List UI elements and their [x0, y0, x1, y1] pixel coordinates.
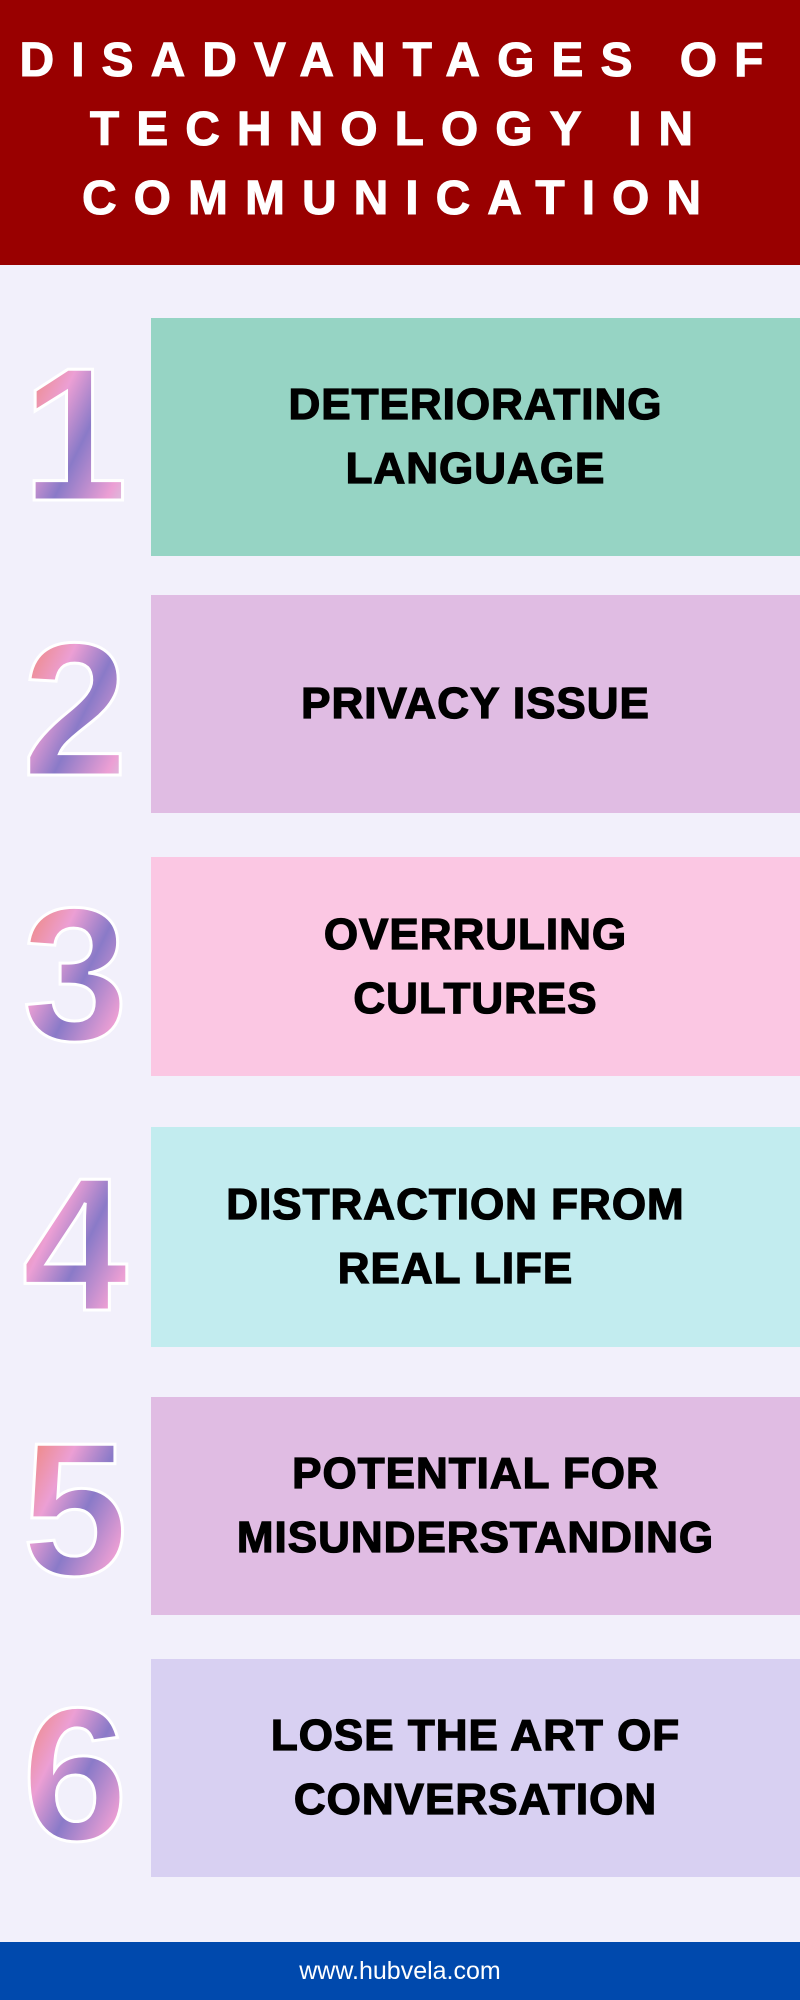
footer [0, 1942, 800, 2000]
box 1: LANGUAGE [346, 444, 605, 493]
box 5 [151, 1397, 800, 1615]
title: TECHNOLOGY IN [90, 103, 710, 156]
box 5: POTENTIAL FOR [292, 1449, 659, 1498]
box 4: REAL LIFE [338, 1244, 573, 1293]
box 3: CULTURES [353, 974, 598, 1022]
box 3: OVERRULING [324, 910, 627, 958]
box 6: LOSE THE ART OF [271, 1711, 680, 1760]
title: DISADVANTAGES OF [20, 34, 780, 87]
footer: www.hubvela.com [299, 1957, 501, 1985]
title [0, 0, 800, 265]
title: COMMUNICATION [82, 172, 718, 225]
box 1: DETERIORATING [289, 380, 662, 429]
box 4 [151, 1127, 800, 1347]
box 2 [151, 595, 800, 813]
box 1 [151, 318, 800, 556]
box 3 [151, 857, 800, 1076]
box 5: MISUNDERSTANDING [237, 1513, 714, 1562]
box 2: PRIVACY ISSUE [301, 679, 650, 728]
box 4: DISTRACTION FROM [226, 1180, 685, 1229]
box 6 [151, 1659, 800, 1877]
box 6: CONVERSATION [294, 1775, 657, 1824]
